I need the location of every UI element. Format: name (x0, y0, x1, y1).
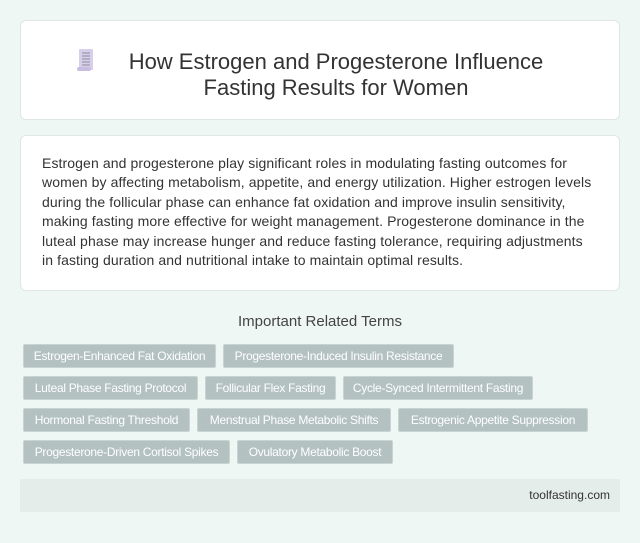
tags: Estrogenic Appetite Suppression (411, 413, 575, 427)
description text: in fasting duration and nutritional intake to maintain optimal results. (42, 252, 463, 268)
description text (42, 155, 591, 268)
description text: women by affecting metabolism, appetite, and energy utilization. Higher estrogen levels (42, 174, 591, 190)
description text: making fasting more effective for weight management. Progesterone dominance in the (42, 213, 585, 229)
tags: Follicular Flex Fasting (216, 381, 325, 395)
tags: Cycle-Synced Intermittent Fasting (353, 381, 523, 395)
tags: Progesterone-Driven Cortisol Spikes (35, 445, 218, 459)
description card (20, 135, 620, 291)
icon: document (77, 49, 93, 71)
tags: Luteal Phase Fasting Protocol (35, 381, 186, 395)
footer (20, 479, 620, 512)
description text: luteal phase may increase hunger and reduce fasting tolerance, requiring adjustments (42, 233, 583, 249)
tags: Menstrual Phase Metabolic Shifts (210, 413, 378, 427)
tags: Progesterone-Induced Insulin Resistance (235, 349, 442, 363)
heading: related terms: Important Related Terms (238, 313, 402, 330)
description text: during the follicular phase can enhance fat oxidation and improve insulin sensitivity, (42, 194, 566, 210)
tags: Ovulatory Metabolic Boost (249, 445, 381, 459)
tags: Hormonal Fasting Threshold (35, 413, 178, 427)
title card (20, 20, 620, 120)
footer text: toolfasting.com (529, 488, 610, 502)
tags: Estrogen-Enhanced Fat Oxidation (34, 349, 205, 363)
title: How Estrogen and Progesterone Influence Fasting Results for Women (129, 49, 543, 100)
description text: Estrogen and progesterone play significant roles in modulating fasting outcomes for (42, 155, 567, 171)
